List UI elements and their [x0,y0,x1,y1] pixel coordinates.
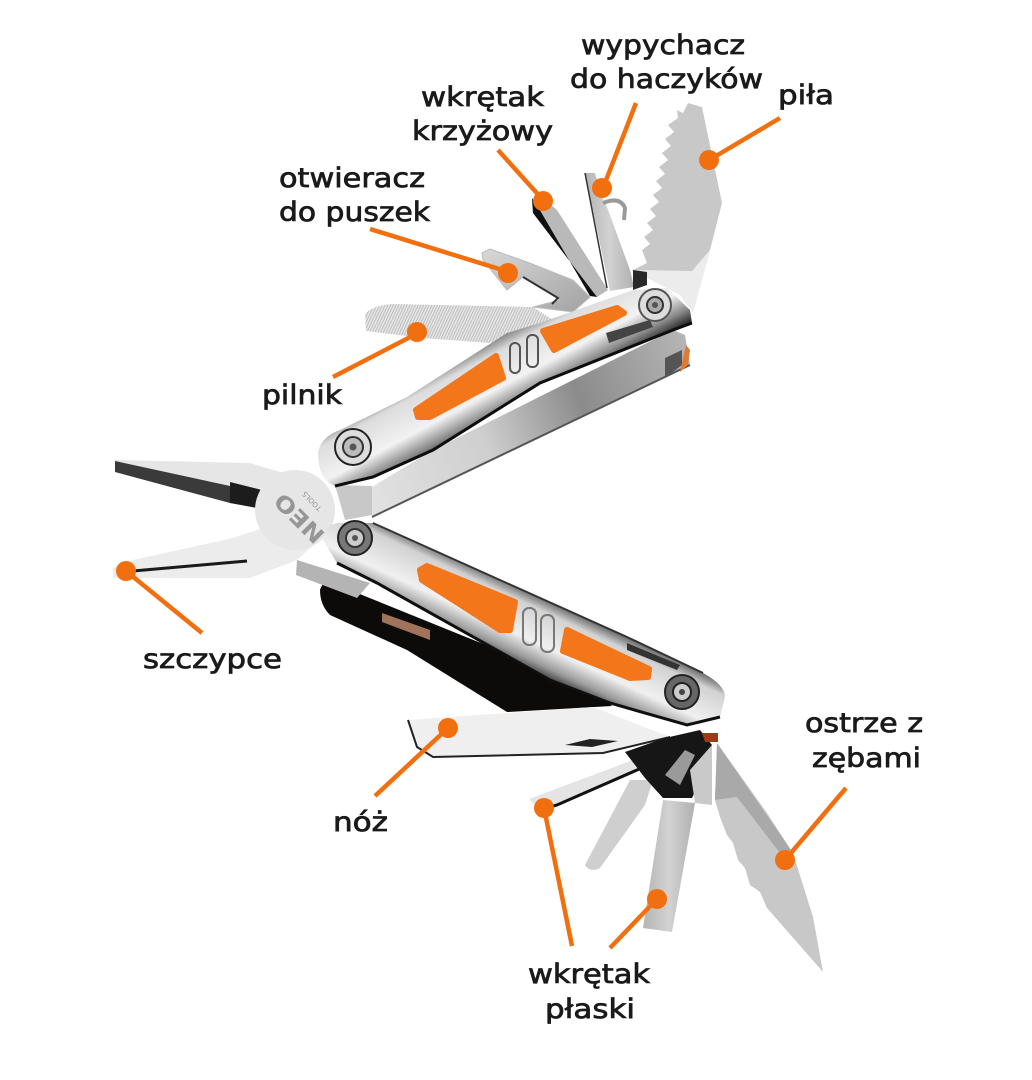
grip slots [510,335,538,373]
orange grip 4 [563,630,649,678]
tool: can opener [482,249,590,312]
callout: ostrze z zębami: ostrze z [805,708,923,739]
logo: NEO TOOLS: NEO [270,487,330,547]
tool: saw [633,103,722,312]
callout: wkrętak płaski: wkrętak [528,959,650,990]
callout: wypychacz do haczyków [570,30,763,198]
callout: piła: piła [778,80,834,111]
bottom screws [338,521,699,709]
callout: otwieracz do puszek: do puszek [279,197,430,228]
callout: pilnik [262,322,427,411]
logo: NEO TOOLS: TOOLS [300,489,324,513]
callout: nóż: nóż [333,807,388,838]
tool: file [365,304,553,343]
hex block [296,560,370,598]
callout: ostrze z zębami: zębami [812,743,921,774]
top handle [318,288,692,486]
callout: ostrze z zębami [775,708,923,870]
callout: szczypce: szczypce [143,644,282,675]
callout: pilnik: pilnik [262,380,342,411]
callout: wypychacz do haczyków: do haczyków [570,64,763,95]
bottom dark body [320,582,612,712]
top screws [335,289,671,465]
tool: knife [408,707,670,757]
tool hub [625,730,718,805]
callout: wkrętak krzyżowy [412,82,553,211]
lower lock slider [627,643,680,670]
callout: szczypce [116,561,282,675]
top tool body [335,330,690,520]
callout: otwieracz do puszek [279,163,518,283]
pliers: upper jaw [115,460,290,508]
orange grip 2 [543,308,624,350]
callout: wkrętak krzyżowy: krzyżowy [412,116,553,147]
callout: wkrętak płaski: płaski [545,994,635,1025]
grip slots lower [523,608,554,652]
pliers: lower jaw [113,520,330,578]
tool: serrated blade [715,743,823,972]
tool: hook pusher [585,173,634,291]
callout: wkrętak płaski [528,798,667,1025]
tool: flat screwdriver 3 [643,800,695,932]
callout: wypychacz do haczyków: wypychacz [581,30,745,61]
tool: flat screwdriver 1 [529,760,653,810]
lock slider [606,320,653,343]
tool: flat screwdriver 2 [585,780,653,870]
pliers head with logo [255,470,335,550]
callout: nóż [333,718,458,838]
orange grip 3 [420,566,515,630]
orange grip 1 [416,356,503,417]
callout: wkrętak krzyżowy: wkrętak [421,82,544,113]
callout: piła [699,80,834,170]
tool: cross screwdriver [532,196,608,297]
bottom handle [323,521,725,725]
callout: otwieracz do puszek: otwieracz [279,163,425,194]
